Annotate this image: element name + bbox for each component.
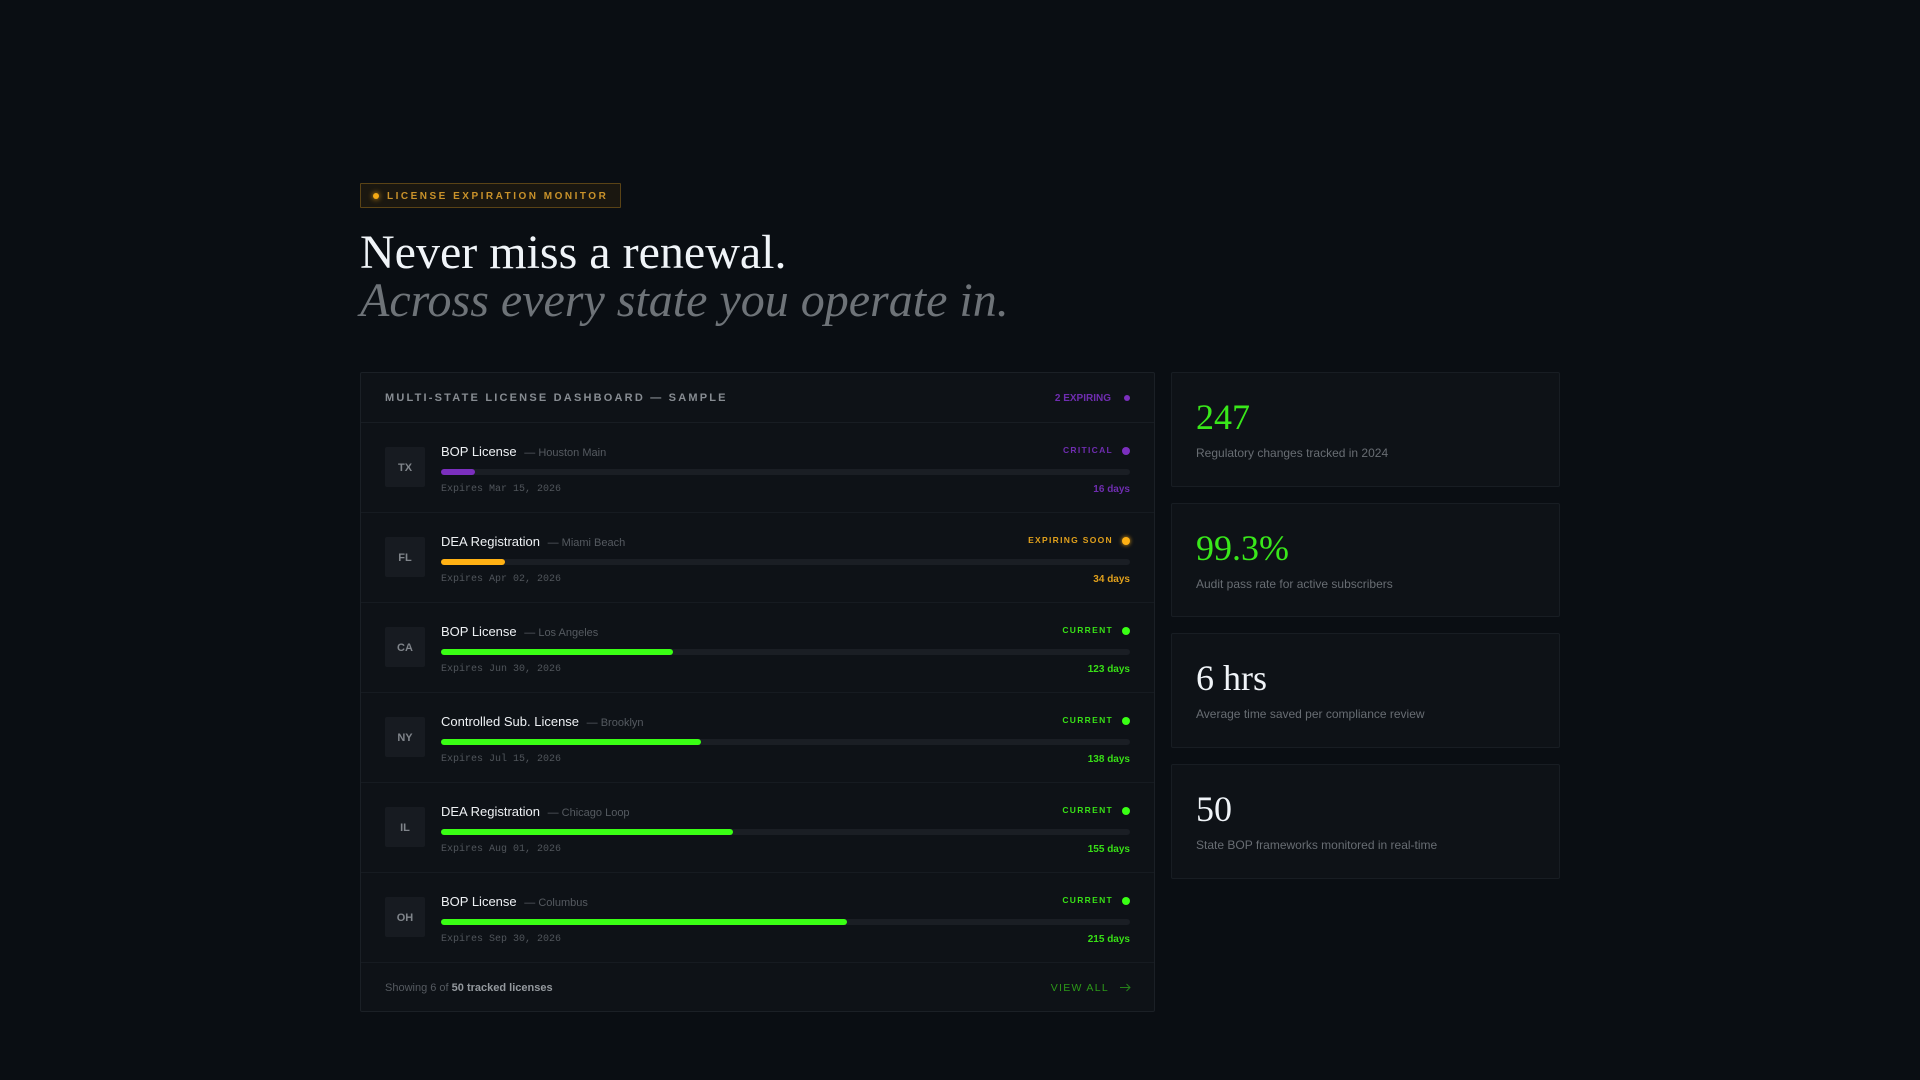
- row: New York controlled substance license: NY: [397, 732, 413, 744]
- stat card: regulatory changes: [1171, 372, 1560, 487]
- title: [357, 226, 1009, 327]
- row: Illinois DEA registration: 155 days: [1088, 844, 1130, 855]
- row: New York controlled substance license: CURRENT: [1062, 715, 1113, 725]
- title: Never miss a renewal.: [360, 226, 786, 279]
- row: Illinois DEA registration: Expires Aug 01, 2026: [441, 844, 561, 855]
- row: Ohio BOP license: BOP License — Columbus: [441, 894, 588, 909]
- panel header: [361, 373, 1154, 423]
- panel footer: VIEW ALL: [1051, 982, 1109, 994]
- stat card: audit pass rate: Audit pass rate for active subscribers: [1196, 577, 1393, 591]
- panel header: MULTI-STATE LICENSE DASHBOARD — SAMPLE: [385, 392, 728, 404]
- row: Florida DEA registration: [361, 513, 1154, 603]
- row: New York controlled substance license: Expires Jul 15, 2026: [441, 754, 561, 765]
- stat card: state frameworks: State BOP frameworks monitored in real-time: [1196, 838, 1437, 852]
- panel footer: Showing 6 of 50 tracked licenses: [385, 982, 553, 994]
- stat card: audit pass rate: 99.3%: [1196, 528, 1289, 568]
- row: New York controlled substance license: [361, 693, 1154, 783]
- stat card: state frameworks: 50: [1196, 789, 1232, 829]
- tag: license expiration monitor: LICENSE EXPIRATION MONITOR: [387, 191, 608, 202]
- row: Ohio BOP license: OH: [397, 912, 413, 924]
- stat card: time saved: [1171, 633, 1560, 748]
- row: California BOP license: BOP License — Los Angeles: [441, 624, 598, 639]
- row: Texas BOP license: TX: [398, 462, 412, 474]
- row: Florida DEA registration: EXPIRING SOON: [1028, 535, 1113, 545]
- title: Across every state you operate in.: [360, 274, 1009, 327]
- row: Ohio BOP license: CURRENT: [1062, 895, 1113, 905]
- row: Texas BOP license: BOP License — Houston Main: [441, 444, 606, 459]
- row: California BOP license: 123 days: [1088, 664, 1130, 675]
- row: California BOP license: CA: [397, 642, 413, 654]
- row: Texas BOP license: Expires Mar 15, 2026: [441, 484, 561, 495]
- row: Illinois DEA registration: CURRENT: [1062, 805, 1113, 815]
- row: Illinois DEA registration: IL: [400, 822, 410, 834]
- row: Ohio BOP license: 215 days: [1088, 934, 1130, 945]
- row: Florida DEA registration: Expires Apr 02, 2026: [441, 574, 561, 585]
- stat card: regulatory changes: 247: [1196, 397, 1250, 437]
- row: Florida DEA registration: DEA Registration — Miami Beach: [441, 534, 625, 549]
- row: New York controlled substance license: 138 days: [1088, 754, 1130, 765]
- row: Illinois DEA registration: DEA Registration — Chicago Loop: [441, 804, 630, 819]
- row: Ohio BOP license: Expires Sep 30, 2026: [441, 934, 561, 945]
- row: Florida DEA registration: FL: [398, 552, 412, 564]
- row: Ohio BOP license: [361, 873, 1154, 963]
- tag: license expiration monitor: [360, 183, 621, 208]
- row: Florida DEA registration: 34 days: [1093, 574, 1130, 585]
- stat card: time saved: 6 hrs: [1196, 658, 1267, 698]
- row: Texas BOP license: [361, 423, 1154, 513]
- stat card: regulatory changes: Regulatory changes tracked in 2024: [1196, 446, 1388, 460]
- stat card: time saved: Average time saved per compliance review: [1196, 707, 1425, 721]
- stat card: state frameworks: [1171, 764, 1560, 879]
- row: Texas BOP license: CRITICAL: [1063, 445, 1113, 455]
- stat card: audit pass rate: [1171, 503, 1560, 617]
- panel: license dashboard: [360, 372, 1155, 1012]
- row: Illinois DEA registration: [361, 783, 1154, 873]
- row: California BOP license: [361, 603, 1154, 693]
- row: California BOP license: CURRENT: [1062, 625, 1113, 635]
- row: Texas BOP license: 16 days: [1093, 484, 1130, 495]
- panel header: 2 EXPIRING: [1055, 393, 1111, 404]
- row: New York controlled substance license: Controlled Sub. License — Brooklyn: [441, 714, 644, 729]
- row: California BOP license: Expires Jun 30, 2026: [441, 664, 561, 675]
- panel footer: [385, 982, 1131, 994]
